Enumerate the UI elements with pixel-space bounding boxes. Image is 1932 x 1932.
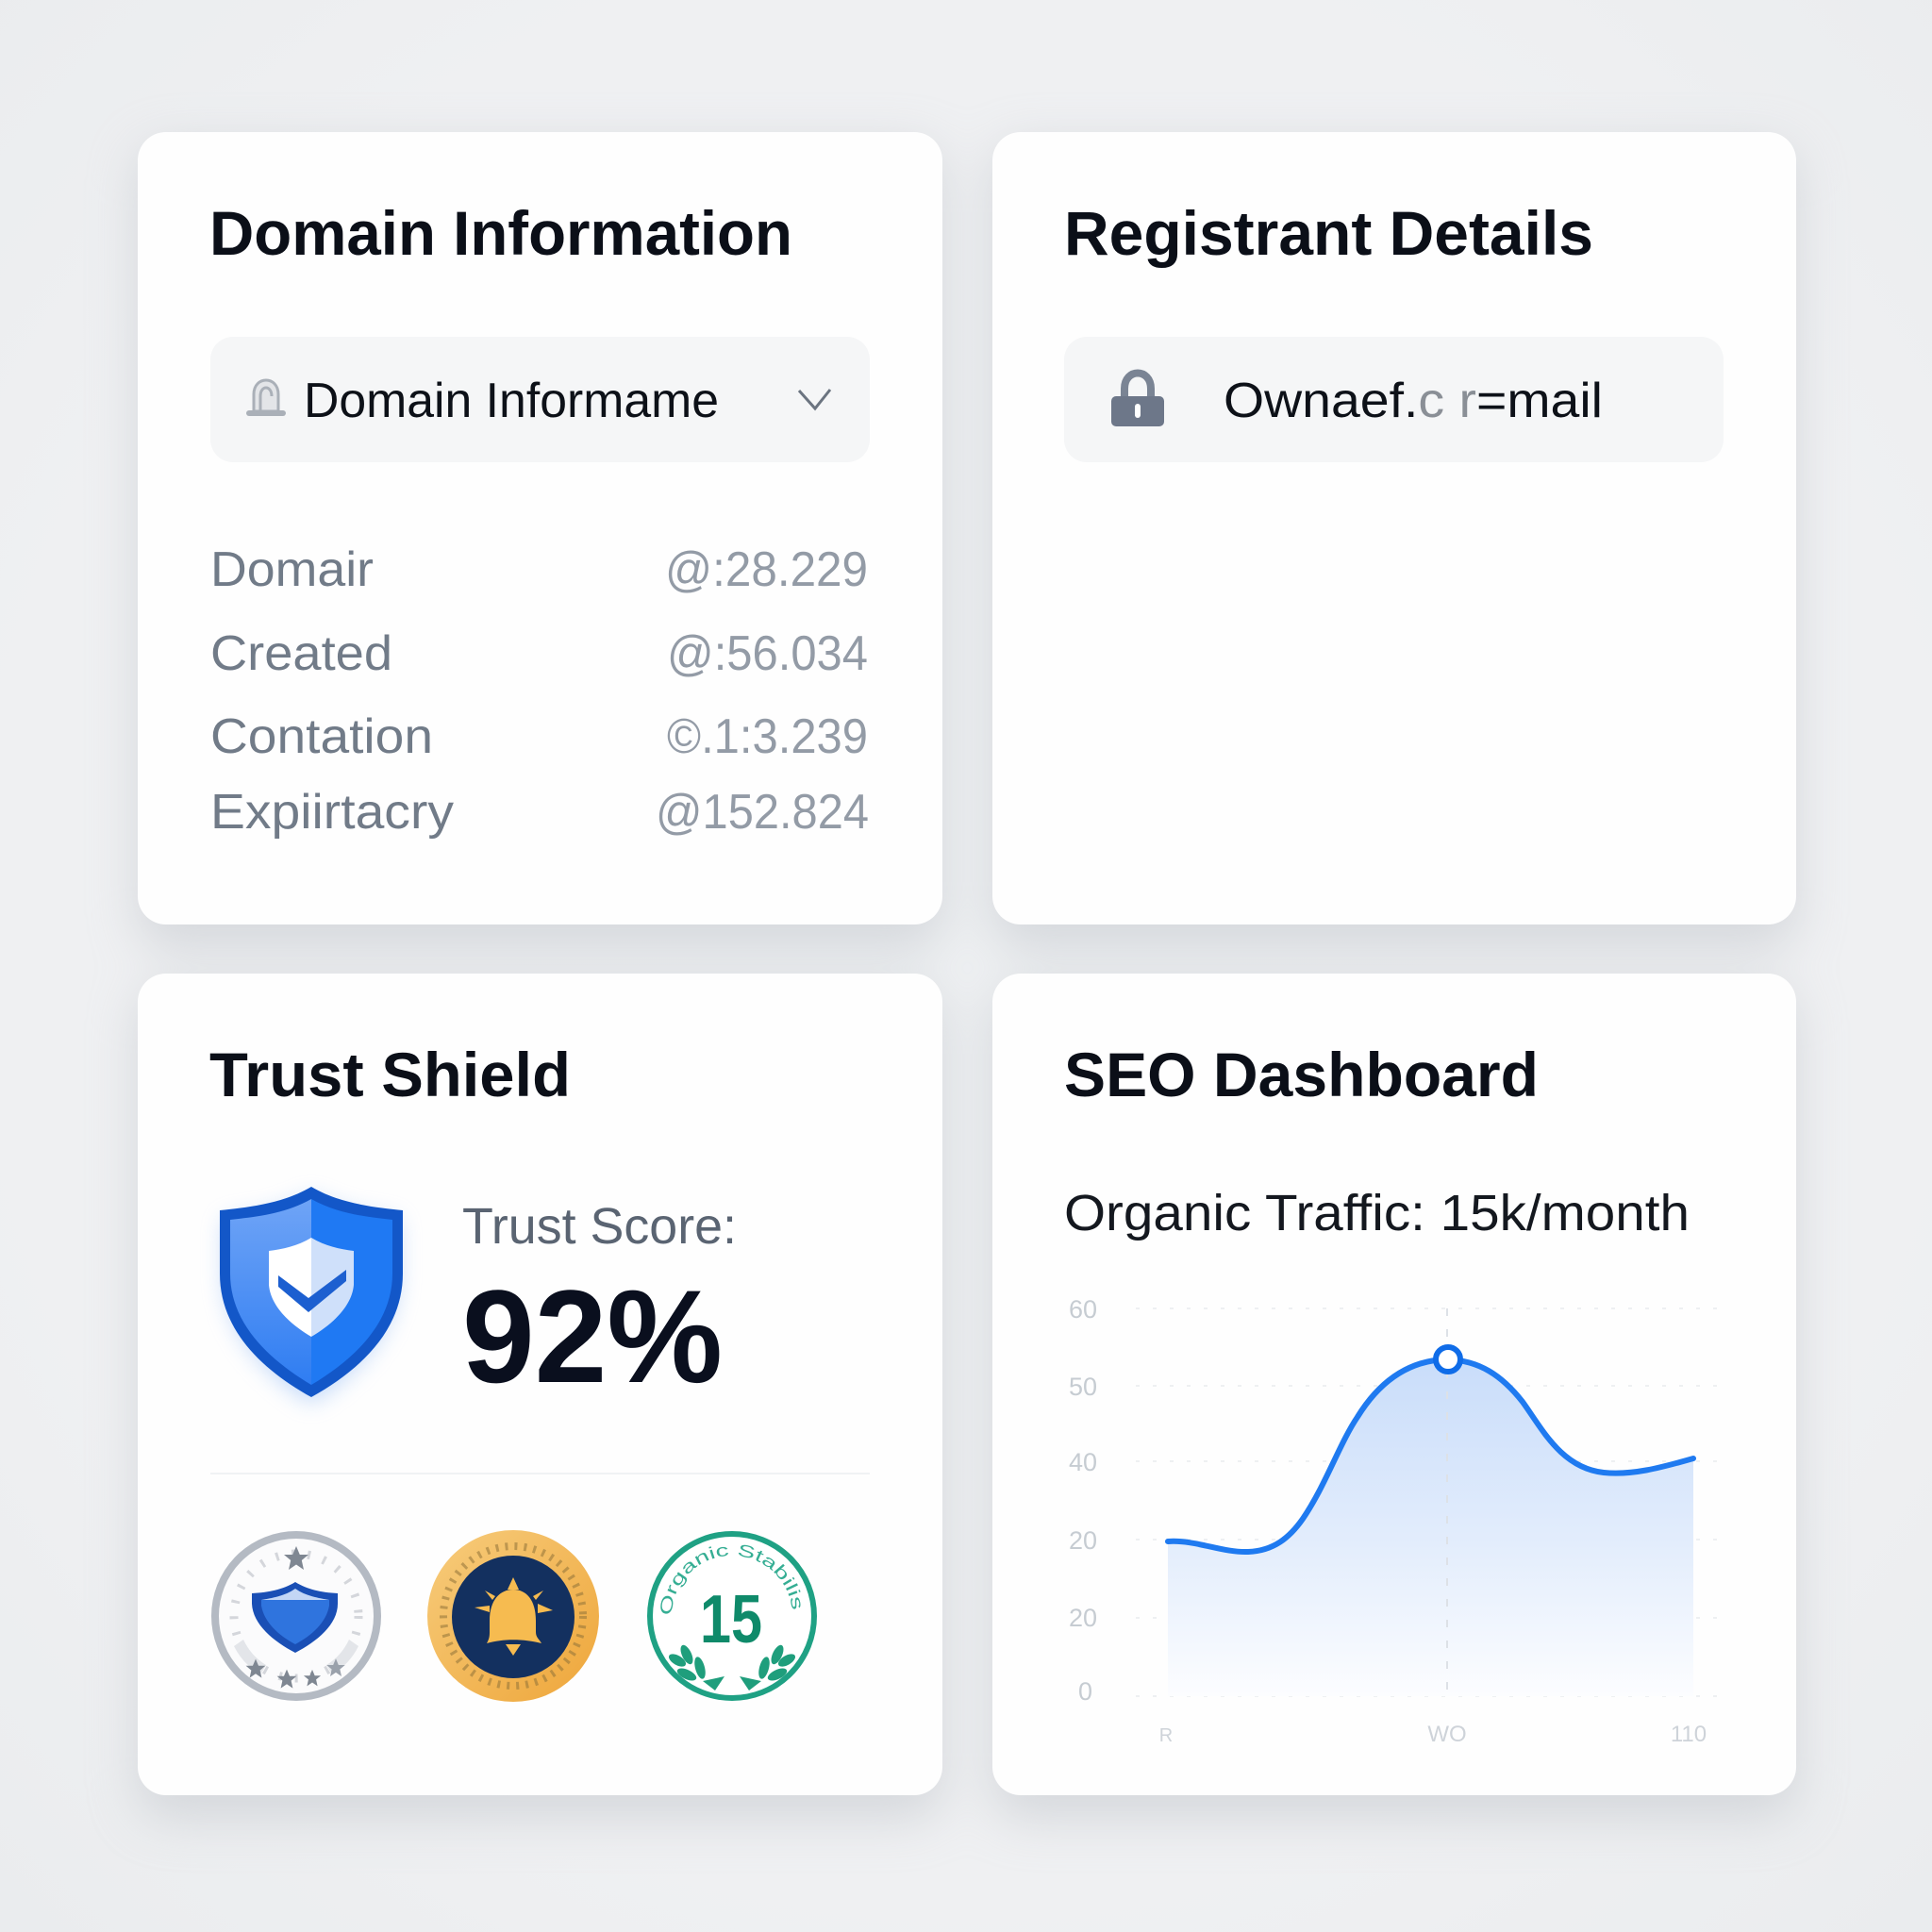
icon: lock (1111, 374, 1164, 426)
area fill (1168, 1359, 1693, 1696)
y axis labels: 0 (1078, 1677, 1092, 1706)
panel: seo dashboard (992, 974, 1796, 1795)
y axis labels: 40 (1069, 1448, 1097, 1476)
y axis labels (1069, 1295, 1097, 1706)
row: expiry: Expiirtacry (210, 785, 454, 840)
icon: chevron (799, 390, 830, 408)
badge: green organic: Organic Stabilis (660, 1545, 801, 1614)
heading: trust shield: Trust Shield (209, 1040, 571, 1109)
panel: registrant details (992, 132, 1796, 924)
heading: registrant details: Registrant Details (1064, 198, 1593, 268)
row: domain: @:28.229 (665, 542, 868, 597)
x axis labels (1159, 1722, 1707, 1747)
trust score label: Trust Score: (462, 1198, 737, 1255)
y axis labels: 50 (1069, 1373, 1097, 1401)
line chart: organic traffic (1069, 1295, 1722, 1747)
icon: bell (249, 380, 283, 413)
row: expiry: @152.824 (656, 785, 869, 840)
y axis labels: 60 (1069, 1295, 1097, 1324)
row: contation: Contation (210, 709, 433, 764)
peak marker (1436, 1347, 1460, 1372)
field: owner email (1064, 337, 1724, 462)
y axis labels: 20 (1069, 1526, 1097, 1555)
panel: trust shield (138, 974, 942, 1795)
dropdown: domain name (210, 337, 870, 462)
row: contation: ©.1:3.239 (667, 709, 868, 764)
row: created (210, 626, 868, 681)
badge: gold bell (427, 1530, 599, 1702)
dropdown label: Domain Informame (304, 374, 719, 428)
icon: shield (220, 1187, 403, 1403)
row: created: @:56.034 (667, 626, 868, 681)
trust score value: 92% (462, 1262, 723, 1410)
panel: domain information (138, 132, 942, 924)
row: created: Created (210, 626, 392, 681)
x axis labels: WO (1427, 1722, 1467, 1747)
heading: seo dashboard: SEO Dashboard (1064, 1040, 1539, 1109)
y axis labels: 20 (1069, 1604, 1097, 1632)
badge: silver shield (215, 1535, 377, 1697)
field label: Ownaef.c r=mail (1224, 374, 1603, 428)
heading: domain information: Domain Information (209, 198, 792, 268)
badge: green organic (647, 1531, 817, 1701)
row: contation (210, 709, 868, 764)
x axis labels: 110 (1671, 1722, 1707, 1747)
row: expiry (210, 785, 869, 840)
x axis labels: R (1159, 1725, 1173, 1746)
organic traffic label: Organic Traffic: 15k/month (1064, 1185, 1690, 1241)
traffic line (1168, 1359, 1693, 1552)
row: domain (210, 542, 868, 597)
row: domain: Domair (210, 542, 374, 597)
badge: green organic: 15 (700, 1582, 762, 1657)
